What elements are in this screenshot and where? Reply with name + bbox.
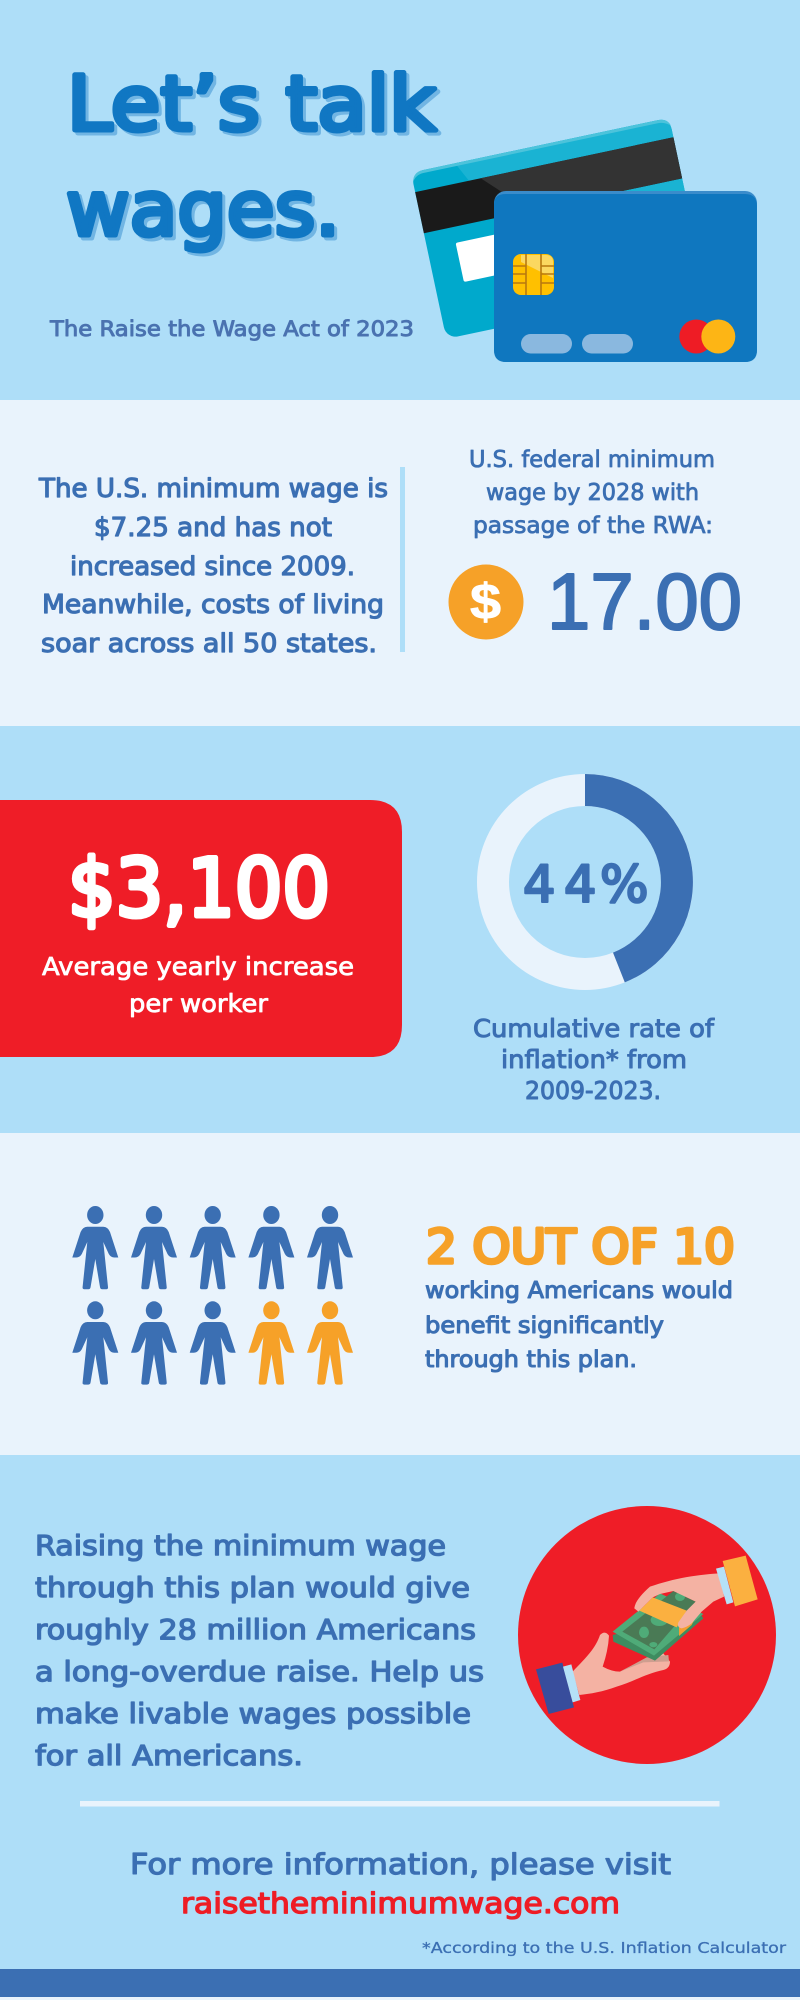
text: more information: For more information, please visit	[130, 1848, 671, 1881]
icon: card logo	[679, 320, 735, 354]
text: raise paragraph: for all Americans.	[35, 1740, 303, 1772]
text: footnote: *According to the U.S. Inflation Calculator	[422, 1939, 787, 1957]
panel: call to action	[0, 1455, 800, 1969]
text: federal minimum wage label: passage of the RWA:	[473, 513, 713, 539]
text: raise paragraph: roughly 28 million Americans	[35, 1614, 476, 1646]
icon: front card	[494, 191, 757, 362]
text: raise paragraph: make livable wages possible	[35, 1698, 471, 1730]
text: minimum wage paragraph: The U.S. minimum wage is	[38, 474, 388, 504]
text: yearly increase label	[42, 952, 354, 1018]
text: minimum wage paragraph: $7.25 and has not	[94, 513, 332, 543]
title: wages.	[66, 164, 340, 253]
title	[66, 59, 436, 253]
chart: people pictogram	[72, 1206, 353, 1385]
text: raise paragraph: a long-overdue raise. Help us	[35, 1656, 484, 1688]
panel: minimum wage	[0, 400, 800, 726]
text: raise paragraph: Raising the minimum wage	[35, 1530, 446, 1562]
footer band	[0, 1969, 800, 2000]
text: federal minimum wage label: U.S. federal minimum	[469, 447, 715, 473]
text: workers description: benefit significantly	[425, 1313, 664, 1339]
text: inflation caption: Cumulative rate of	[473, 1014, 715, 1043]
icon: credit cards	[411, 118, 757, 362]
subtitle: The Raise the Wage Act of 2023	[49, 317, 414, 341]
text: minimum wage paragraph: Meanwhile, costs of living	[42, 590, 384, 620]
chart: inflation donut	[493, 790, 677, 974]
stat: 17.00: 17.00	[547, 557, 742, 646]
text: inflation caption	[473, 1014, 715, 1105]
callout: yearly increase	[0, 800, 402, 1057]
stat: 2 out of 10: 2 OUT OF 10	[426, 1220, 735, 1275]
panel: header	[0, 0, 800, 400]
icon: banknotes	[613, 1591, 703, 1661]
text: federal minimum wage label: wage by 2028 with	[486, 480, 699, 506]
text: yearly increase label: per worker	[129, 989, 269, 1018]
text: minimum wage paragraph	[38, 474, 388, 659]
panel: workers	[0, 1133, 800, 1455]
text: minimum wage paragraph: increased since 2009.	[70, 552, 355, 582]
stat: 44%: 44%	[523, 856, 648, 915]
text: yearly increase label: Average yearly increase	[42, 952, 354, 981]
text: workers description	[425, 1278, 733, 1373]
text: workers description: working Americans would	[425, 1278, 733, 1304]
icon: lower hand	[536, 1633, 670, 1714]
icon: upper hand	[634, 1556, 758, 1628]
icon: dollar coin	[448, 564, 524, 640]
icon: hands exchanging money	[518, 1506, 776, 1764]
text: inflation caption: 2009-2023.	[525, 1076, 661, 1105]
text: raise paragraph: through this plan would give	[35, 1572, 470, 1604]
text: raise paragraph	[35, 1530, 484, 1772]
icon: back card	[411, 118, 705, 339]
text: federal minimum wage label	[469, 447, 715, 539]
text: website: raisetheminimumwage.com	[181, 1887, 620, 1920]
text: workers description: through this plan.	[425, 1347, 637, 1373]
text: minimum wage paragraph: soar across all 50 states.	[41, 629, 377, 659]
stat: $3,100: $3,100	[68, 842, 330, 935]
icon: chip	[513, 254, 554, 295]
text: inflation caption: inflation* from	[501, 1045, 687, 1074]
icon: card pills	[521, 334, 633, 354]
panel: stats	[0, 726, 800, 1133]
icon: dollar coin: $	[470, 574, 501, 630]
title: Let’s talk	[67, 59, 436, 148]
